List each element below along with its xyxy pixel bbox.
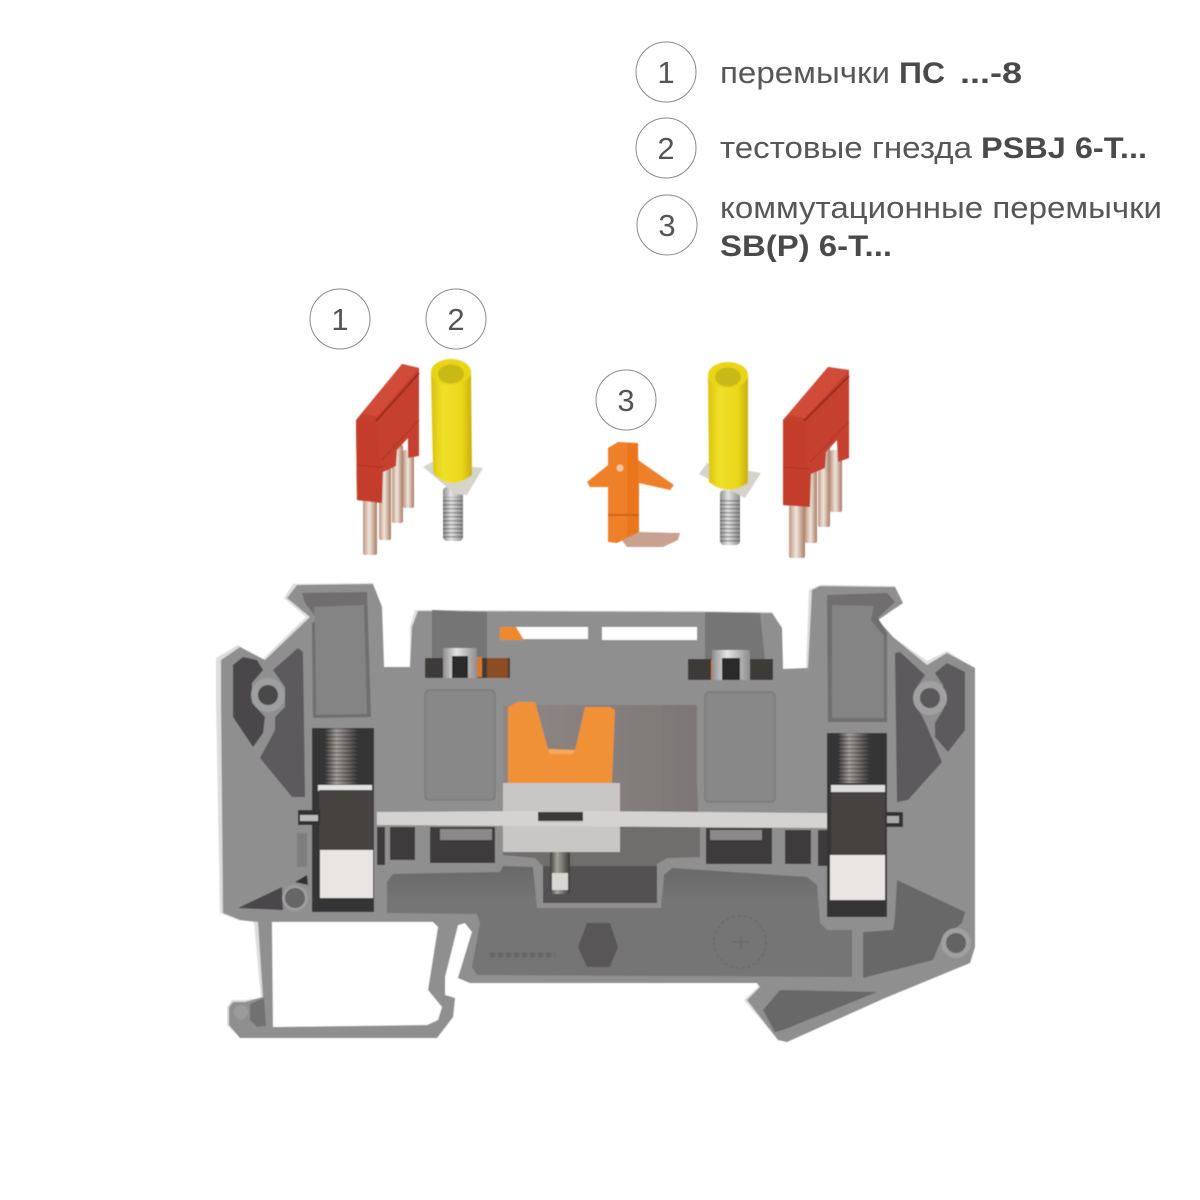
icon: right red bridge — [783, 367, 849, 558]
centre screw — [550, 850, 570, 894]
legend item 2: тестовые гнезда — [720, 130, 973, 165]
callout number 3: 3 — [617, 383, 635, 418]
centre cavity — [503, 705, 700, 903]
foot hook — [234, 998, 266, 1027]
side rectangles — [425, 690, 775, 802]
right dark pockets — [763, 652, 965, 1032]
pocket inner bars — [440, 829, 762, 840]
icon: left red bridge — [356, 364, 419, 555]
callout number 1: 1 — [331, 302, 349, 337]
body silhouette — [221, 584, 975, 1042]
orange slider — [508, 702, 615, 783]
icon: orange switching bridge — [587, 442, 680, 547]
hex screw right — [712, 650, 750, 680]
lower small pockets — [377, 827, 827, 866]
rail window — [272, 922, 442, 1027]
body highlight edge — [216, 583, 975, 1042]
stamp on recess — [490, 916, 766, 968]
callout number 2 — [426, 289, 486, 349]
terminal block body — [216, 583, 975, 1042]
callout number 3 — [596, 370, 656, 430]
legend — [636, 42, 1162, 263]
legend item 2 — [636, 118, 1147, 178]
oval hole — [578, 923, 618, 967]
metal bus bar — [377, 811, 827, 828]
callout number 2: 2 — [447, 302, 465, 337]
clamp slot — [538, 812, 583, 821]
legend item 2: 2 — [657, 131, 675, 166]
upper slots — [425, 610, 773, 680]
legend item 3: 3 — [658, 208, 676, 243]
legend item 1: ...-8 — [960, 57, 1022, 90]
terminal pin holes — [298, 810, 903, 827]
legend item 3: коммутационные перемычки — [720, 190, 1162, 225]
mounting holes — [251, 678, 971, 958]
left contact cavity — [312, 728, 374, 912]
icon: right yellow socket — [699, 362, 761, 545]
right tower recess — [827, 593, 895, 722]
lower recess — [387, 866, 852, 977]
legend item 1: перемычки — [720, 55, 890, 90]
small slit — [297, 833, 307, 867]
legend item 1 — [636, 42, 1022, 102]
right contact cavity — [827, 733, 887, 917]
legend item 3 — [637, 190, 1162, 263]
legend item 1: ПС — [899, 57, 945, 90]
centre pit — [543, 866, 657, 903]
callout number 1 — [310, 289, 370, 349]
legend item 1: 1 — [657, 55, 675, 90]
legend item 2: PSBJ 6-T... — [981, 132, 1147, 165]
marker windows — [500, 627, 697, 640]
icon: left yellow socket — [423, 359, 483, 541]
left tower recess — [302, 592, 371, 718]
left dark pockets — [233, 648, 308, 910]
metal clamp — [503, 783, 620, 852]
legend item 3: SB(P) 6-T... — [720, 230, 892, 263]
hex screw left — [443, 648, 477, 678]
